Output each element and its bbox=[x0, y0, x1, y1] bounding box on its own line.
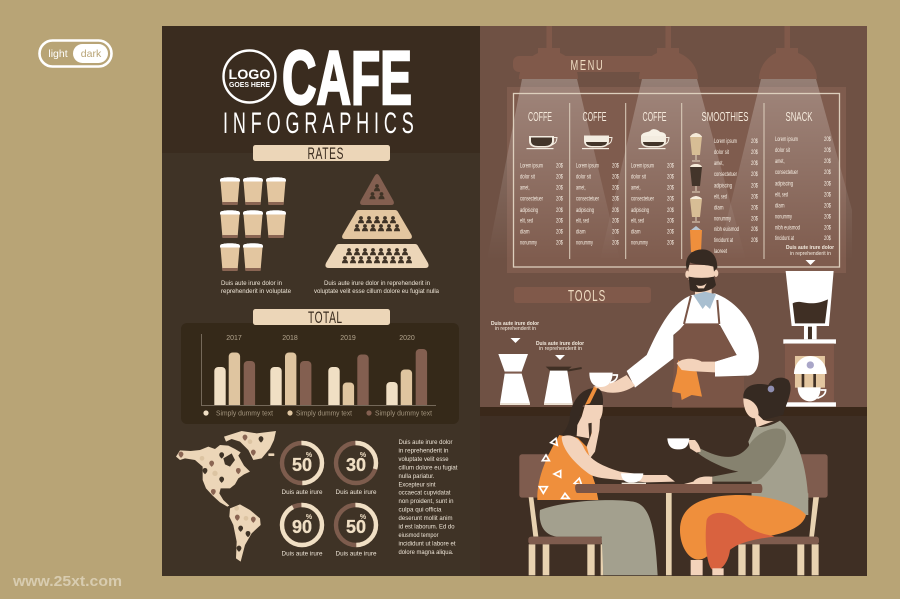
menu list: coffee one: adipiscing bbox=[520, 207, 538, 214]
bar chart: 2017 bbox=[226, 335, 242, 342]
menu list: snack: dolor sit bbox=[775, 147, 790, 154]
menu list: smoothies: 20$ bbox=[751, 204, 758, 212]
menu list: smoothies: 20$ bbox=[751, 171, 758, 178]
menu list: coffee three: 20$ bbox=[667, 174, 674, 180]
tool captions bbox=[491, 245, 835, 360]
illustration: woman right bbox=[667, 378, 808, 575]
menu list: coffee one: diam bbox=[520, 228, 530, 236]
menu list: coffee two: 20$ bbox=[612, 240, 619, 246]
lamps and menu label: MENU bbox=[570, 57, 603, 74]
menu list: coffee one: 20$ bbox=[556, 207, 563, 214]
donut: 50 percent second: 50 bbox=[346, 517, 366, 537]
menu list: smoothies: 20$ bbox=[751, 194, 758, 200]
donut: 90 percent bbox=[282, 505, 323, 558]
menu list: coffee two: diam bbox=[576, 228, 586, 236]
heading: tools: TOOLS bbox=[568, 287, 605, 305]
title: INFOGRAPHICS bbox=[223, 108, 414, 140]
menu list: coffee two: consectetuer bbox=[576, 196, 600, 202]
menu list: coffee one: 20$ bbox=[556, 240, 563, 246]
menu list: snack: 20$ bbox=[824, 224, 831, 232]
donut: 30 percent bbox=[336, 443, 377, 496]
donut: 90 percent: Duis aute irure bbox=[282, 550, 323, 558]
heading: rates bbox=[253, 145, 390, 163]
text block: description bbox=[398, 440, 458, 556]
menu list: coffee two: nonummy bbox=[576, 240, 593, 246]
text block: description: dolore magna aliqua. bbox=[398, 550, 454, 556]
menu frame bbox=[514, 94, 840, 267]
tool captions: Duis aute irure dolor bbox=[491, 321, 540, 327]
menu list: snack: 20$ bbox=[824, 136, 831, 143]
caption: pyramid bbox=[314, 281, 440, 295]
menu list: coffee two: 20$ bbox=[612, 228, 619, 236]
menu list: smoothies: Lorem ipsum bbox=[714, 138, 737, 145]
menu list: snack: 20$ bbox=[824, 235, 831, 242]
menu list: coffee two: 20$ bbox=[612, 196, 619, 202]
text block: description: cillum dolore eu fugiat bbox=[398, 465, 458, 471]
lamps and menu label bbox=[513, 26, 817, 79]
mode toggle: light bbox=[48, 48, 68, 60]
heading: rates: RATES bbox=[308, 145, 343, 163]
menu list: coffee one: amet, bbox=[520, 184, 530, 192]
menu list: coffee two: Lorem ipsum bbox=[576, 162, 599, 170]
tool captions: in reprehenderit in bbox=[790, 251, 831, 257]
menu list: smoothies: 20$ bbox=[751, 160, 758, 167]
watermark: www.25xt.com bbox=[12, 574, 122, 590]
menu list: snack: 20$ bbox=[824, 192, 831, 198]
menu list: smoothies: amet, bbox=[714, 160, 724, 167]
mode toggle bbox=[40, 40, 112, 66]
menu list: snack: 20$ bbox=[824, 158, 831, 165]
text block: description: Excepteur sint bbox=[398, 482, 436, 488]
title bbox=[223, 36, 414, 140]
menu list: coffee two: 20$ bbox=[612, 174, 619, 180]
menu list: smoothies: 20$ bbox=[751, 216, 758, 222]
chart legend: Simply dummy text bbox=[216, 410, 273, 418]
text block: description: in reprehenderit in bbox=[398, 448, 448, 454]
donut: 50 percent second: Duis aute irure bbox=[336, 550, 377, 558]
menu list: snack bbox=[775, 136, 831, 242]
icon: espresso cup bbox=[526, 136, 557, 149]
menu list: coffee one: 20$ bbox=[556, 184, 563, 192]
menu list: coffee two: dolor sit bbox=[576, 174, 591, 180]
menu list: coffee three: dolor sit bbox=[631, 174, 646, 180]
icon: cappuccino cup bbox=[638, 129, 669, 149]
menu list: coffee two: 20$ bbox=[612, 162, 619, 170]
caption: cups: reprehenderit in voluptate bbox=[221, 289, 292, 295]
menu list: coffee three: consectetuer bbox=[631, 196, 655, 202]
menu list: coffee two: amet, bbox=[576, 184, 586, 192]
menu list: smoothies bbox=[714, 138, 758, 255]
menu list: coffee one: 20$ bbox=[556, 162, 563, 170]
menu list: snack: amet, bbox=[775, 158, 785, 165]
menu list: coffee three: 20$ bbox=[667, 218, 674, 224]
menu list: coffee one: 20$ bbox=[556, 228, 563, 236]
menu list: snack: nonummy bbox=[775, 214, 792, 220]
panel: cafe wall bbox=[480, 26, 867, 407]
menu headings: COFFE bbox=[642, 109, 667, 124]
icon: smoothie glasses bbox=[690, 133, 702, 252]
menu list: coffee three: 20$ bbox=[667, 240, 674, 246]
menu list: coffee three: adipiscing bbox=[631, 207, 649, 214]
menu list: coffee two: 20$ bbox=[612, 207, 619, 214]
menu list: snack: elit, sed bbox=[775, 192, 788, 198]
menu list: coffee two: elit, sed bbox=[576, 218, 589, 224]
logo badge bbox=[224, 50, 276, 102]
menu headings: COFFE bbox=[582, 109, 607, 124]
menu list: smoothies: nonummy bbox=[714, 216, 731, 222]
donut: 90 percent: % bbox=[306, 514, 313, 521]
logo badge: GOES HERE bbox=[229, 82, 270, 89]
menu list: coffee two: 20$ bbox=[612, 218, 619, 224]
menu headings: SMOOTHIES bbox=[702, 109, 749, 124]
text block: description: nulla pariatur. bbox=[398, 474, 435, 480]
tool: coffee machine bbox=[783, 271, 836, 407]
menu list: snack: 20$ bbox=[824, 180, 831, 188]
title: CAFE bbox=[282, 36, 412, 121]
logo badge: LOGO bbox=[228, 66, 271, 82]
table top bbox=[575, 484, 762, 493]
menu list: smoothies: 20$ bbox=[751, 138, 758, 145]
heading: total: TOTAL bbox=[308, 309, 342, 327]
bar chart: 2018 bbox=[282, 335, 298, 342]
donut: 50 percent second bbox=[336, 505, 377, 558]
chart legend bbox=[203, 410, 432, 418]
panel: menu board bbox=[507, 87, 846, 273]
donut: 50 percent: Duis aute irure bbox=[282, 489, 323, 496]
menu list: snack: 20$ bbox=[824, 147, 831, 154]
chart legend: Simply dummy text bbox=[296, 410, 352, 418]
menu list: coffee three bbox=[631, 162, 674, 246]
menu headings: COFFE bbox=[528, 109, 552, 124]
menu list: coffee three: Lorem ipsum bbox=[631, 162, 654, 170]
donut: 30 percent: % bbox=[360, 452, 367, 459]
text block: description: occaecat cupvidatat bbox=[398, 491, 451, 497]
bar chart: 2020 bbox=[399, 335, 415, 342]
bar chart bbox=[202, 334, 436, 406]
tool captions: Duis aute irure dolor bbox=[536, 341, 585, 347]
menu list: smoothies: 20$ bbox=[751, 149, 758, 156]
heading: tools bbox=[514, 287, 651, 305]
menu list: smoothies: consectetuer bbox=[714, 171, 738, 178]
menu list: coffee one: dolor sit bbox=[520, 174, 535, 180]
menu list: coffee three: 20$ bbox=[667, 196, 674, 202]
text block: description: Duis aute irure dolor bbox=[398, 440, 452, 446]
menu list: coffee three: 20$ bbox=[667, 162, 674, 170]
menu list: smoothies: dolor sit bbox=[714, 149, 729, 156]
text block: description: id est laborum. Ed do bbox=[398, 524, 455, 530]
text block: description: deserunt mollit anim bbox=[398, 516, 452, 522]
icon: latte cup bbox=[582, 136, 612, 149]
menu list: coffee two: adipiscing bbox=[576, 207, 594, 214]
menu headings bbox=[528, 109, 813, 124]
menu list: coffee one: Lorem ipsum bbox=[520, 162, 543, 170]
icon: coffee cups rate bbox=[220, 177, 286, 271]
donut: 50 percent: % bbox=[306, 452, 313, 459]
menu list: coffee three: nonummy bbox=[631, 240, 648, 246]
donut: 30 percent: 30 bbox=[346, 455, 366, 475]
donut: 90 percent: 90 bbox=[292, 517, 312, 537]
menu list: smoothies: elit, sed bbox=[714, 194, 727, 200]
illustration: woman left bbox=[537, 387, 675, 575]
menu list: snack: nibh euismod bbox=[775, 224, 800, 232]
light cones bbox=[487, 79, 852, 260]
tool captions: in reprehenderit in bbox=[495, 326, 536, 332]
tool captions: Duis aute irure dolor bbox=[786, 245, 835, 251]
menu list: coffee one: 20$ bbox=[556, 218, 563, 224]
menu list: smoothies: adipiscing bbox=[714, 182, 732, 190]
text block: description: voluptate velit esse bbox=[398, 457, 449, 463]
menu list: smoothies: nibh euismod bbox=[714, 226, 739, 233]
menu list: smoothies: laoreet bbox=[714, 248, 727, 255]
menu list: snack: tincidunt at bbox=[775, 235, 794, 242]
text block: description: incididunt ut labore et bbox=[398, 541, 456, 547]
tool captions: in reprehenderit in bbox=[539, 346, 582, 352]
menu list: coffee two: 20$ bbox=[612, 184, 619, 192]
menu list: smoothies: 20$ bbox=[751, 226, 758, 233]
menu list: smoothies: tincidunt at bbox=[714, 237, 733, 244]
menu list: smoothies: 20$ bbox=[751, 182, 758, 190]
menu list: coffee one: elit, sed bbox=[520, 218, 533, 224]
menu list: snack: 20$ bbox=[824, 214, 831, 220]
menu list: coffee three: 20$ bbox=[667, 228, 674, 236]
menu list: snack: 20$ bbox=[824, 202, 831, 210]
menu list: smoothies: diam bbox=[714, 204, 724, 212]
menu list: snack: Lorem ipsum bbox=[775, 136, 798, 143]
donut: 50 percent: 50 bbox=[292, 455, 312, 475]
caption: cups bbox=[221, 281, 292, 295]
caption: cups: Duis aute irure dolor in bbox=[221, 281, 282, 287]
mode toggle: dark bbox=[81, 48, 102, 60]
caption: pyramid: Duis aute irure dolor in reprehenderit in bbox=[324, 281, 430, 287]
illustration: table and chairs bbox=[519, 454, 828, 575]
donut: 50 percent second: % bbox=[360, 514, 367, 521]
menu list: snack: consectetuer bbox=[775, 169, 799, 176]
menu list: coffee two bbox=[576, 162, 619, 246]
text block: description: culpa qui officia bbox=[398, 508, 442, 514]
menu list: coffee three: diam bbox=[631, 228, 640, 236]
menu list: coffee one: nonummy bbox=[520, 240, 537, 246]
heading: total bbox=[253, 309, 390, 327]
menu list: coffee one: 20$ bbox=[556, 174, 563, 180]
menu list: coffee three: 20$ bbox=[667, 184, 674, 192]
caption: pyramid: voluptate velit esse cillum dolore eu fugiat nulla bbox=[314, 289, 440, 295]
menu list: snack: diam bbox=[775, 202, 784, 210]
menu list: smoothies: 20$ bbox=[751, 237, 758, 244]
illustration: barista bbox=[589, 249, 759, 408]
menu list: snack: adipiscing bbox=[775, 180, 793, 188]
map: americas bbox=[176, 431, 276, 562]
donut: 50 percent bbox=[282, 443, 323, 496]
menu list: coffee three: amet, bbox=[631, 184, 641, 192]
panel: bar chart background bbox=[181, 323, 459, 424]
menu list: snack: 20$ bbox=[824, 169, 831, 176]
bar chart: 2019 bbox=[340, 335, 356, 342]
donut: 30 percent: Duis aute irure bbox=[336, 489, 377, 496]
menu list: coffee one bbox=[520, 162, 563, 246]
text block: description: non proident, sunt in bbox=[398, 499, 454, 505]
menu list: coffee one: 20$ bbox=[556, 196, 563, 202]
menu list: coffee one: consectetuer bbox=[520, 196, 544, 202]
chart: people pyramid bbox=[325, 174, 429, 268]
panel: left background bbox=[162, 26, 480, 576]
text block: description: eiusmod tempor bbox=[398, 533, 438, 539]
menu list: coffee three: 20$ bbox=[667, 207, 674, 214]
menu headings: SNACK bbox=[786, 109, 813, 124]
floor and counter bbox=[480, 407, 867, 576]
chart legend: Simply dummy text bbox=[375, 410, 432, 418]
tool: pour-over jug bbox=[498, 354, 530, 405]
menu list: coffee three: elit, sed bbox=[631, 218, 644, 224]
tool: turkish pot bbox=[544, 367, 582, 405]
